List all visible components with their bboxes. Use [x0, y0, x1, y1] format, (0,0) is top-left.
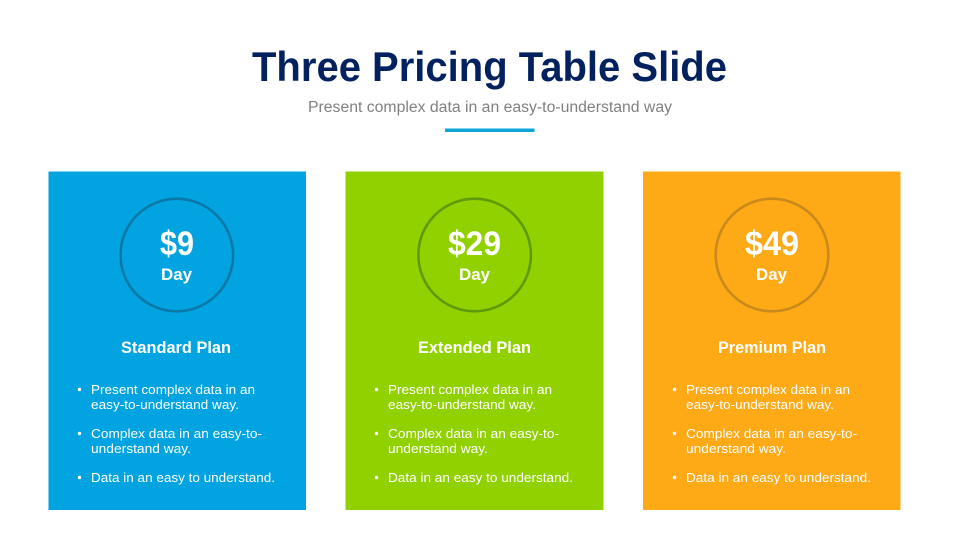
card background	[48, 172, 306, 510]
title: Three Pricing Table Slide	[252, 43, 727, 90]
price period: Day	[459, 265, 491, 284]
feature list: Complex data in an easy-to-	[388, 426, 559, 441]
plan name: Extended Plan	[418, 339, 531, 357]
panel: standard plan	[48, 172, 306, 510]
feature list: Data in an easy to understand.	[388, 470, 573, 485]
plan name: Standard Plan	[121, 339, 231, 357]
price: $29	[448, 225, 501, 263]
card background	[643, 172, 900, 510]
feature list: Present complex data in an	[388, 382, 552, 397]
price circle	[120, 199, 233, 311]
feature list: understand way.	[686, 441, 786, 456]
feature list: Present complex data in an	[686, 382, 850, 397]
price: $49	[745, 225, 799, 263]
feature list: understand way.	[91, 441, 191, 456]
price: $9	[160, 225, 194, 263]
price circle	[418, 199, 531, 311]
feature list	[375, 382, 573, 485]
feature list: easy-to-understand way.	[388, 397, 536, 412]
feature list	[673, 382, 871, 485]
panel: extended plan	[346, 172, 604, 510]
price period: Day	[161, 265, 193, 284]
feature list: Data in an easy to understand.	[686, 470, 871, 485]
price circle	[716, 199, 828, 311]
feature list: Complex data in an easy-to-	[686, 426, 857, 441]
feature list: Data in an easy to understand.	[91, 470, 275, 485]
panel: premium plan	[643, 172, 900, 510]
price period: Day	[756, 265, 788, 284]
feature list: easy-to-understand way.	[686, 397, 834, 412]
accent rule	[445, 128, 534, 132]
feature list	[78, 382, 275, 485]
feature list: Complex data in an easy-to-	[91, 426, 262, 441]
card background	[346, 172, 604, 510]
subtitle: Present complex data in an easy-to-understand way	[308, 99, 672, 116]
feature list: understand way.	[388, 441, 488, 456]
feature list: easy-to-understand way.	[91, 397, 239, 412]
plan name: Premium Plan	[718, 339, 826, 357]
feature list: Present complex data in an	[91, 382, 255, 397]
